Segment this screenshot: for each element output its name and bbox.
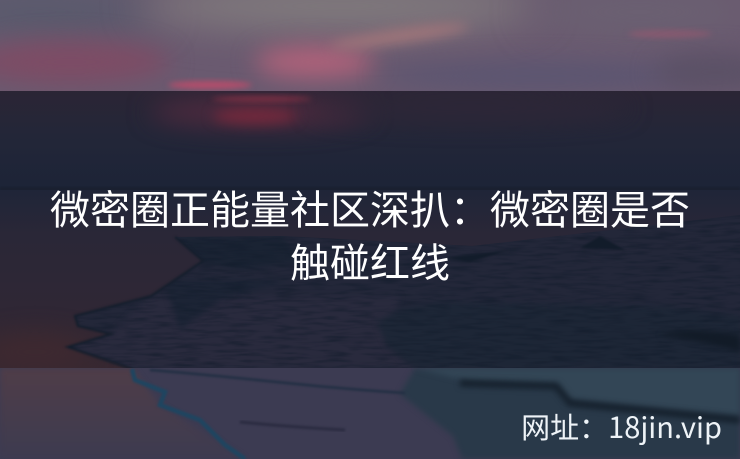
sea	[0, 91, 740, 142]
shoreline	[0, 223, 740, 368]
title: 微密圈正能量社区深扒：微密圈是否	[50, 178, 690, 236]
title: 触碰红线	[290, 231, 450, 289]
lower beach (lighter band)	[0, 368, 740, 459]
sky	[0, 0, 740, 92]
water mass	[74, 216, 740, 368]
watermark url: 网址：18jin.vip	[521, 405, 722, 447]
title	[50, 178, 690, 289]
